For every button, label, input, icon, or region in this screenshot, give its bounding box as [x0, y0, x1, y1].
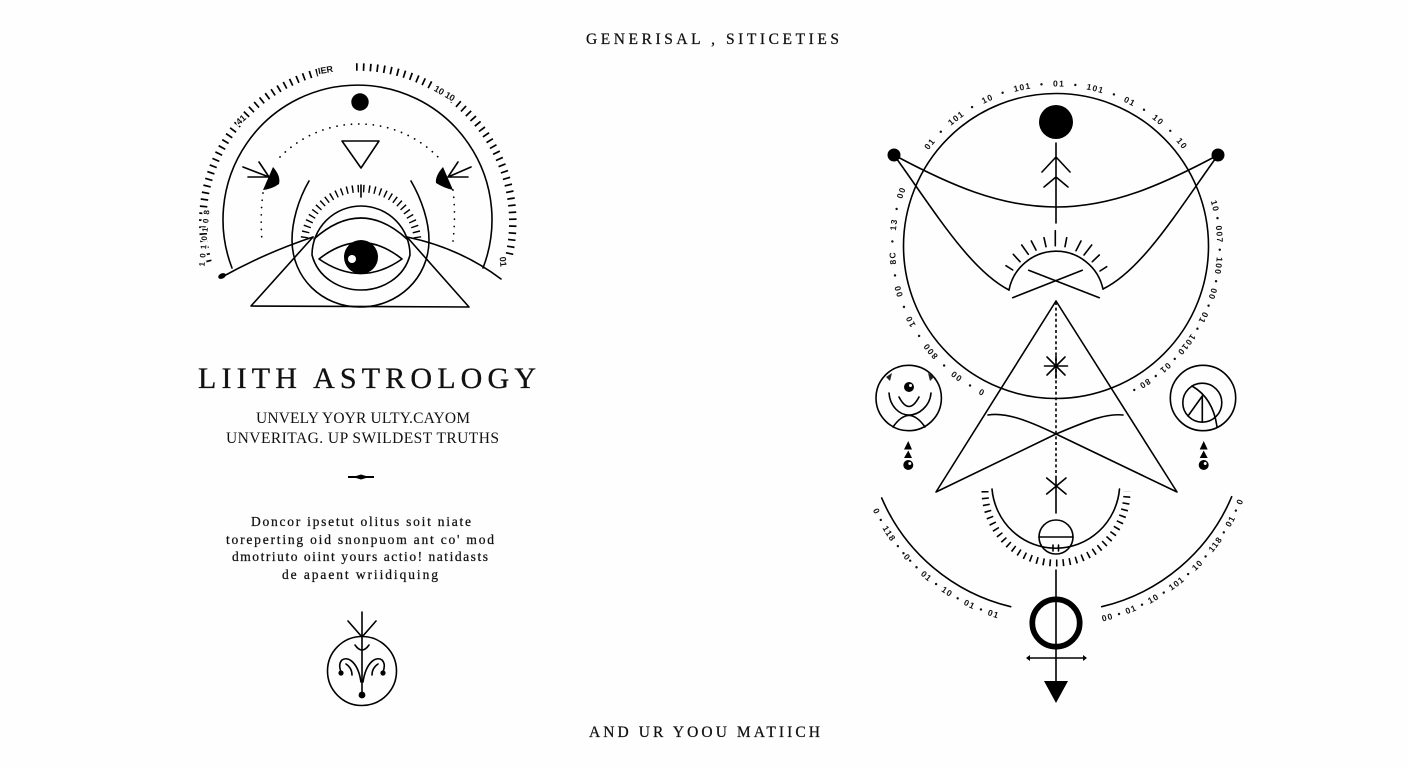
pyramid — [251, 237, 469, 307]
inner dome — [312, 206, 410, 290]
star lower and stem — [1047, 477, 1066, 513]
right stacked triangles — [1199, 441, 1209, 470]
lower right numbers: 00 • 01 • 10 • 101 • 10 • 118 • 01 • 0 — [1102, 500, 1243, 622]
bowl ticks — [985, 491, 1127, 563]
top heading: GENERISAL , SITICETIES — [586, 31, 839, 48]
body text: Doncor ipsetut olitus soit niate — [251, 514, 471, 529]
left numbers: 0 • 00 • 800 • 10 • 00 • 8C • 13 • 00 — [890, 188, 984, 396]
icon: all-seeing eye emblem — [198, 64, 513, 307]
title: LIITH ASTROLOGY — [198, 362, 536, 395]
outer arc — [223, 85, 492, 268]
side nodes — [888, 148, 1224, 162]
left stacked triangles — [903, 441, 913, 470]
dotted arcs — [261, 124, 454, 241]
top disc and stem — [1039, 105, 1073, 223]
body text: dmotriuto oiint yours actio! natidasts — [232, 549, 488, 564]
dotted axis — [1055, 302, 1057, 477]
lower arcs — [882, 497, 1232, 607]
tick ring — [203, 67, 513, 262]
main circle — [904, 94, 1208, 398]
right numbers: • 10 • 007 • 100 • 00 • 01 • 1010 • 01 • 80 • 1 — [1133, 200, 1223, 392]
side rays — [217, 237, 501, 280]
top dot — [351, 93, 369, 111]
central triangle — [936, 301, 1177, 492]
subtitle — [226, 410, 499, 447]
body text: de apaent wriidiquing — [282, 567, 438, 582]
eye — [319, 240, 402, 274]
small divided circle — [1039, 520, 1073, 554]
left dart — [243, 162, 279, 190]
dome cross — [1013, 270, 1099, 298]
tick ring labels: 01 — [498, 256, 508, 267]
tick ring labels: 1 0 1 0 1 0 8 — [198, 209, 211, 267]
brow arc — [314, 218, 407, 239]
right wheel medallion — [1170, 365, 1236, 431]
top numbers: 01 • 101 • 10 • 101 • 01 • 101 • 01 • 10 • 10 — [924, 80, 1186, 150]
small inverted triangle — [342, 141, 379, 168]
bottom caption: AND UR YOOU MATIICH — [589, 724, 820, 741]
inner rays — [304, 185, 418, 238]
bowl — [992, 489, 1120, 548]
tick ring labels: IER — [317, 64, 334, 76]
tick ring labels: 10 10 — [432, 83, 457, 103]
subtitle: UNVELY YOYR ULTY.CAYOM — [256, 410, 470, 427]
large enclosing curve — [292, 181, 429, 307]
right dart — [436, 162, 471, 190]
dome rays — [1006, 231, 1107, 271]
body text: toreperting oid snonpuom ant co' mod — [226, 532, 494, 547]
hanging curve — [894, 155, 1218, 207]
icon: bottom left sigil — [328, 612, 396, 706]
left face medallion — [876, 365, 941, 431]
tick ring labels: 41 — [234, 113, 248, 127]
divider mark — [348, 474, 374, 480]
side curves — [894, 155, 1218, 290]
lower left numbers: 0 • 118 • •0• • 01 • 10 • 01 • 01 — [874, 508, 998, 618]
planetary symbol — [1026, 570, 1087, 703]
tick ring labels — [198, 64, 508, 267]
star upper — [1044, 356, 1068, 378]
subtitle: UNVERITAG. UP SWILDEST TRUTHS — [226, 430, 499, 447]
dome — [1009, 251, 1103, 290]
body text — [226, 514, 494, 582]
